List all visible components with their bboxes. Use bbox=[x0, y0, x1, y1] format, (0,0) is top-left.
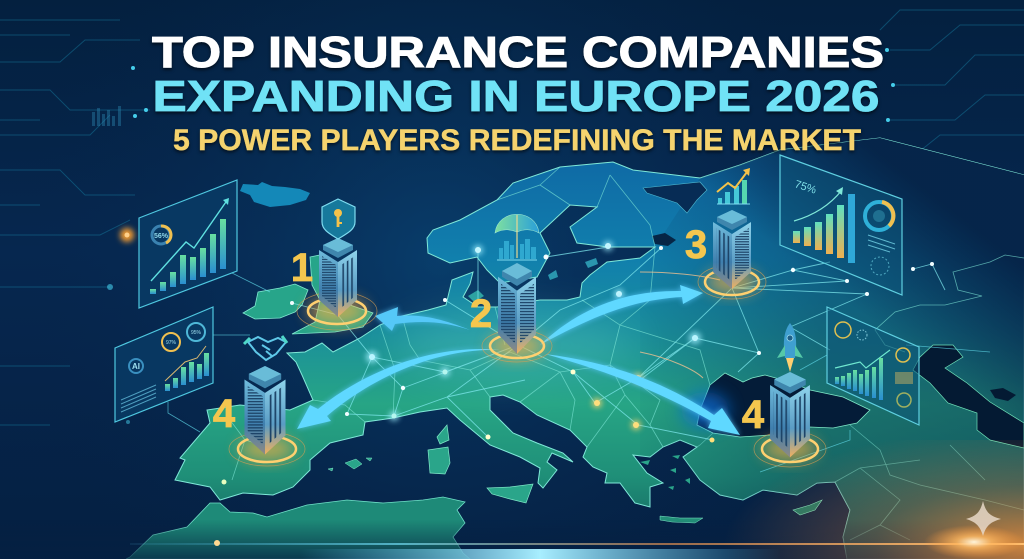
panel: 75% dashboard: 75% bbox=[793, 178, 818, 197]
Black Sea blue glow bbox=[681, 392, 729, 428]
panel: AI dashboard: 97% bbox=[166, 340, 177, 346]
icon: sparkle bbox=[966, 501, 1001, 536]
central land glow bbox=[395, 310, 635, 380]
network nodes bbox=[222, 243, 934, 484]
continent bbox=[175, 138, 1024, 559]
building 4 west bbox=[244, 366, 286, 454]
bar texture left bbox=[92, 106, 121, 126]
icon: shield with key bbox=[322, 199, 355, 239]
building 3 bbox=[713, 210, 751, 289]
North Africa bbox=[126, 497, 470, 559]
icon: rocket bbox=[777, 323, 803, 372]
panel: AI dashboard: 95% bbox=[191, 330, 202, 336]
Corsica bbox=[437, 425, 449, 444]
Great Britain bbox=[292, 255, 373, 334]
Ireland bbox=[243, 284, 308, 319]
Danish islands bbox=[468, 290, 484, 302]
panel: 75% dashboard bbox=[780, 155, 902, 295]
panel: growth dashboard: 56% bbox=[154, 233, 169, 240]
arrow to Turkey bbox=[545, 354, 740, 435]
glowing rings bbox=[229, 265, 826, 467]
north-east fade bbox=[640, 138, 1024, 559]
Cyprus bbox=[793, 500, 822, 515]
Black Sea bbox=[697, 373, 870, 437]
Lake Van bbox=[990, 388, 1016, 401]
circuit lines left bbox=[0, 20, 150, 425]
arrows bbox=[297, 272, 740, 435]
building 4 east bbox=[770, 372, 810, 457]
Aegean islands bbox=[640, 455, 690, 490]
arrow to Spain bbox=[297, 349, 500, 429]
bottom blue light bbox=[300, 549, 780, 559]
number 3: 3 bbox=[685, 223, 707, 267]
Sicily bbox=[487, 484, 533, 503]
building 1 bbox=[319, 238, 357, 317]
icon: growth chart bbox=[717, 168, 750, 204]
panel connector lines bbox=[168, 273, 990, 472]
bright flare right bbox=[924, 525, 1024, 559]
corner orange glow bbox=[724, 440, 1024, 559]
spark on horizon bbox=[214, 540, 220, 546]
number 4 east: 4 bbox=[742, 393, 765, 437]
circuit nodes left bbox=[107, 66, 148, 424]
panel: growth dashboard bbox=[139, 180, 237, 308]
bottom darkening bbox=[0, 520, 1024, 559]
building 2 bbox=[498, 263, 536, 354]
Sardinia bbox=[428, 447, 450, 474]
Lake Ladoga bbox=[652, 233, 676, 246]
title line 2: EXPANDING IN EUROPE 2026 bbox=[152, 72, 880, 121]
title bbox=[152, 28, 884, 157]
number 2: 2 bbox=[470, 292, 492, 336]
number 4 west: 4 bbox=[213, 392, 236, 436]
circuit nodes right bbox=[885, 48, 915, 158]
map of Europe bbox=[126, 138, 1024, 559]
orange spark bbox=[120, 228, 134, 242]
node glows bbox=[366, 241, 701, 430]
Balearics bbox=[328, 458, 372, 471]
arrow to east bbox=[540, 285, 703, 345]
title line 1: TOP INSURANCE COMPANIES bbox=[152, 28, 884, 77]
panel: AI dashboard bbox=[115, 307, 213, 422]
subtitle: 5 POWER PLAYERS REDEFINING THE MARKET bbox=[173, 124, 861, 157]
horizon light line bbox=[130, 543, 1024, 545]
panel: AI dashboard: AI bbox=[132, 362, 140, 371]
icon: handshake bbox=[244, 336, 287, 360]
Caspian Sea bbox=[913, 345, 1024, 448]
eastern dimming bbox=[640, 138, 1024, 559]
Iceland bbox=[240, 182, 310, 207]
network lines bbox=[292, 247, 945, 440]
orange trail lines bbox=[640, 272, 720, 378]
panel: east dashboard bbox=[827, 307, 919, 425]
number 1: 1 bbox=[291, 246, 313, 290]
icon: umbrella over skyline bbox=[495, 214, 539, 260]
circuit lines right bbox=[880, 10, 1024, 155]
arrow to UK bbox=[375, 307, 470, 331]
White Sea bbox=[643, 182, 707, 213]
Crete bbox=[660, 516, 703, 523]
country borders bbox=[230, 167, 1024, 540]
Baltic islands bbox=[548, 258, 598, 280]
